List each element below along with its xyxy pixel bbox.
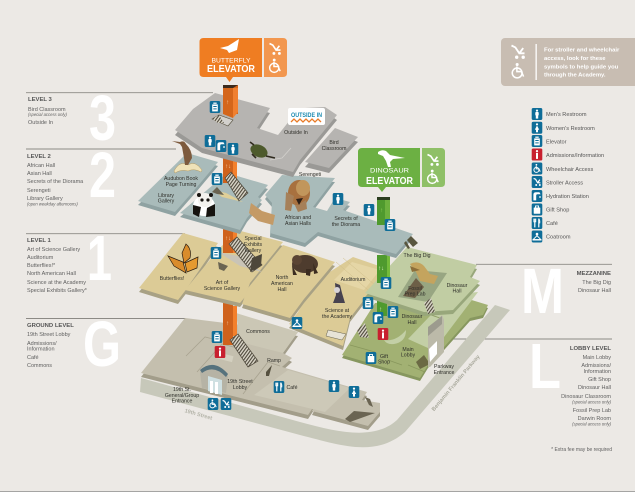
access note box: For stroller and wheelchair bbox=[544, 48, 620, 54]
map labels: Ramp bbox=[267, 358, 281, 364]
legend: gift shop: Gift Shop bbox=[546, 208, 569, 214]
big level numerals bbox=[83, 82, 564, 402]
legend: coatroom: Coatroom bbox=[546, 234, 571, 240]
map labels: Serengeti bbox=[299, 172, 321, 178]
map labels: Science at bbox=[325, 308, 350, 314]
floor: lobby level bbox=[342, 292, 488, 381]
text block: level 1: Butterflies!* bbox=[27, 263, 56, 269]
map labels: Entrance bbox=[172, 398, 192, 404]
floor: level 3 main bbox=[175, 93, 337, 177]
elevator arrows: ↑ bbox=[226, 321, 229, 327]
icon: level 3 men's restroom bbox=[205, 135, 215, 147]
map labels: 19th St. bbox=[173, 387, 191, 393]
map labels: Dinosaur bbox=[402, 314, 423, 320]
street and parkway bbox=[140, 305, 510, 447]
illustration: panda bbox=[193, 193, 215, 217]
map labels: Audubon Book bbox=[164, 176, 198, 182]
text block: level 1 bbox=[27, 238, 88, 294]
map labels: Science Gallery bbox=[204, 286, 241, 292]
text block: level 2: (open weekday afternoons) bbox=[27, 202, 78, 206]
text block: lobby level: Darwin Room bbox=[578, 416, 611, 422]
access note box: access, look for these bbox=[544, 56, 606, 62]
elevator shaft: butterfly level 2 to 3 bbox=[223, 155, 237, 183]
icon: ground cafe bbox=[274, 381, 284, 393]
legend: cafe: Café bbox=[546, 221, 558, 227]
elevator shaft: butterfly top bbox=[223, 85, 238, 118]
text block: lobby level: LOBBY LEVEL bbox=[570, 346, 611, 352]
map labels: Shop bbox=[378, 360, 390, 366]
legend: hydration: Hydration Station bbox=[546, 194, 589, 200]
map labels: Gift bbox=[380, 354, 389, 360]
text block: level 3: Bird Classroom bbox=[28, 107, 66, 113]
stairs: ground level bbox=[230, 334, 258, 367]
elevator shaft: dinosaur lobby to mezzanine bbox=[377, 300, 387, 316]
text block: level 3: LEVEL 3 bbox=[28, 97, 53, 103]
text block: ground level: GROUND LEVEL bbox=[27, 323, 74, 329]
illustration: turtle bbox=[248, 142, 275, 160]
text block: lobby level: (special access only) bbox=[572, 400, 612, 404]
map labels: American bbox=[271, 281, 293, 287]
text block: level 3: Outside In bbox=[28, 120, 53, 126]
floor: mezzanine bbox=[365, 247, 480, 316]
text block: level 1: North American Hall bbox=[27, 271, 76, 277]
text block: level 1: Science at the Academy bbox=[27, 280, 86, 286]
legend: admissions: Admissions/Information bbox=[546, 153, 604, 159]
icon: level 1 elevator bbox=[211, 247, 221, 259]
map labels: Main bbox=[402, 347, 414, 353]
map labels: the Diorama bbox=[332, 222, 360, 228]
icon: level 3 elevator bbox=[210, 101, 220, 113]
floor: level 2 east bbox=[265, 175, 418, 258]
illustration: dinosaur skeleton bbox=[410, 262, 438, 284]
illustration: lion bbox=[285, 180, 310, 212]
icon: level 3 hydration bbox=[216, 140, 226, 152]
map labels: Dinosaur bbox=[447, 283, 468, 289]
text block: level 1: Special Exhibits Gallery* bbox=[27, 288, 88, 294]
stairs: level 2 to mezzanine bbox=[404, 236, 418, 249]
legend: wheelchair: Wheelchair Access bbox=[546, 167, 593, 173]
floor: north american hall bbox=[242, 245, 335, 322]
elevator shaft: butterfly ground to level 1 bbox=[223, 303, 237, 345]
entrance: 19th street bbox=[200, 365, 228, 395]
butterfly elevator callout: ELEVATOR bbox=[207, 64, 256, 75]
map labels: Butterflies! bbox=[160, 276, 184, 282]
map labels: Hall bbox=[278, 287, 286, 293]
street labels bbox=[184, 353, 482, 422]
outside in logo bbox=[288, 108, 325, 125]
map labels: 19th Street bbox=[227, 379, 253, 385]
street labels: 19th Street bbox=[184, 408, 213, 422]
map labels: Library bbox=[158, 193, 174, 199]
big level numerals: 2 bbox=[89, 139, 116, 211]
map labels: Auditorium bbox=[341, 277, 365, 283]
legend: elevator: Elevator bbox=[546, 140, 567, 146]
text block: mezzanine: Dinosaur Hall bbox=[578, 288, 611, 294]
text block: lobby level: Fossil Prep Lab bbox=[573, 408, 611, 414]
map labels: Commons bbox=[246, 329, 270, 335]
map labels: Gallery bbox=[158, 198, 175, 204]
floor: level 1 science and auditorium bbox=[289, 257, 385, 350]
map icons bbox=[205, 101, 398, 410]
icon: lobby gift shop bbox=[366, 352, 376, 364]
text block: level 2: Library Gallery bbox=[27, 196, 63, 202]
text block: mezzanine: MEZZANINE bbox=[577, 271, 611, 277]
map labels: Exhibits bbox=[244, 242, 262, 248]
icon: mezzanine elevator bbox=[381, 277, 391, 289]
text block: ground level: Information bbox=[27, 346, 55, 352]
icon: level 2 east elevator bbox=[385, 219, 395, 231]
big level numerals: L bbox=[529, 330, 561, 402]
big level numerals: 3 bbox=[89, 82, 116, 154]
floor: level 1 west bbox=[139, 233, 218, 304]
icon: ground information bbox=[215, 346, 225, 358]
legend: men's restroom: Men's Restroom bbox=[546, 112, 587, 118]
text block: lobby level: Admissions/ bbox=[581, 363, 611, 369]
text block: level 2: African Hall bbox=[27, 163, 55, 169]
map labels: Page Turning bbox=[166, 182, 197, 188]
illustration: open book bbox=[174, 163, 202, 173]
map labels: Outside In bbox=[284, 130, 308, 136]
legend bbox=[532, 108, 604, 242]
map labels: Parkway bbox=[434, 364, 454, 370]
text block: ground level: Commons bbox=[27, 363, 52, 369]
stairs: level 1 center bbox=[218, 237, 262, 272]
icon: level 2 elevator bbox=[212, 173, 222, 185]
elevator arrows: ↑↓ bbox=[225, 164, 231, 170]
entrance: parkway bbox=[428, 315, 444, 367]
icon: level 1 coatroom bbox=[292, 317, 302, 329]
text block: ground level: Café bbox=[27, 355, 39, 361]
text block: level 1: Art of Science Gallery bbox=[27, 247, 80, 253]
level leader lines bbox=[26, 93, 612, 339]
map labels: North bbox=[276, 275, 288, 281]
icon: lobby hydration bbox=[373, 312, 383, 324]
icon: ground stroller bbox=[221, 398, 231, 410]
map labels: Bird bbox=[329, 140, 339, 146]
icon: level 3 restroom bbox=[228, 143, 238, 155]
text block: mezzanine: The Big Dig bbox=[582, 280, 611, 286]
access note box: symbols to help guide you bbox=[544, 64, 619, 70]
butterfly elevator callout: BUTTERFLY bbox=[212, 58, 251, 64]
text block: level 2: LEVEL 2 bbox=[27, 154, 52, 160]
map labels: Secrets of bbox=[334, 216, 358, 222]
elevator arrows: ↑ bbox=[380, 208, 383, 214]
elevator arrows bbox=[225, 100, 384, 327]
map labels bbox=[158, 130, 468, 404]
map labels: Art of bbox=[216, 280, 229, 286]
elevator shaft: dinosaur mezzanine to level 2 bbox=[377, 255, 390, 283]
stairs: mezzanine bbox=[424, 298, 435, 314]
stairs: lobby level bbox=[357, 323, 369, 338]
map labels: Gallery bbox=[245, 248, 262, 254]
fossil pit bbox=[398, 270, 447, 302]
text block: level 3 bbox=[28, 97, 67, 126]
floor: level 1 center bbox=[185, 230, 283, 307]
floor: level 2 library bbox=[138, 153, 218, 216]
outside in logo: OUTSIDE IN bbox=[291, 113, 322, 119]
legend: stroller: Stroller Access bbox=[546, 180, 583, 186]
elevator arrows: ↑ bbox=[379, 307, 382, 313]
map labels: Entrance bbox=[434, 370, 454, 376]
illustration: bird bbox=[172, 141, 192, 165]
text block: lobby level: Information bbox=[583, 369, 611, 375]
text block: level 2: Secrets of the Diorama bbox=[27, 179, 84, 185]
text block: level 3: (special access only) bbox=[28, 112, 67, 117]
dinosaur elevator callout: DINOSAUR bbox=[370, 168, 409, 174]
text block: level 2: Asian Hall bbox=[27, 171, 52, 177]
map labels: Lobby bbox=[233, 385, 247, 391]
footnote: * Extra fee may be required bbox=[551, 447, 612, 453]
map labels: General/Group bbox=[165, 393, 199, 399]
big level numerals: 1 bbox=[87, 222, 112, 294]
dinosaur elevator callout: ELEVATOR bbox=[366, 176, 414, 187]
floor: ground level bbox=[141, 313, 380, 430]
map labels: Lobby bbox=[401, 352, 415, 358]
elevator shaft: dinosaur bbox=[377, 197, 390, 226]
legend: women's restroom: Women's Restroom bbox=[546, 126, 595, 132]
access note box: through the Academy. bbox=[544, 72, 606, 78]
stairs: level 2 bbox=[212, 172, 248, 201]
access note box bbox=[501, 38, 635, 86]
text block: ground level: 19th Street Lobby bbox=[27, 332, 71, 338]
icon: ground east men's restroom bbox=[329, 380, 339, 392]
butterfly elevator callout bbox=[200, 38, 287, 82]
map labels: Classroom bbox=[322, 146, 346, 152]
text block: level 2: Serengeti bbox=[27, 188, 51, 194]
text block: lobby level bbox=[561, 346, 612, 426]
stairs: level 3 bbox=[212, 115, 233, 126]
text block: level 1: LEVEL 1 bbox=[27, 238, 52, 244]
elevator arrows: ↑↓ bbox=[225, 236, 231, 242]
icon: lobby elevator bbox=[388, 306, 398, 318]
text block: level 1: Auditorium bbox=[27, 255, 54, 261]
map labels: Hall bbox=[408, 320, 416, 326]
map labels: Fossil bbox=[408, 286, 422, 292]
icon: ground wheelchair bbox=[208, 398, 218, 410]
floor: level 2 center bbox=[180, 173, 268, 234]
text block: ground level bbox=[27, 323, 74, 369]
text block: level 2 bbox=[27, 154, 84, 206]
big level numerals: M bbox=[521, 255, 564, 327]
map labels: Prep Lab bbox=[404, 292, 426, 298]
illustration: science specimen bbox=[333, 283, 345, 303]
text block: lobby level: (special access only) bbox=[572, 422, 612, 426]
illustration: bear bbox=[292, 255, 318, 276]
elevator arrows: ↑↓ bbox=[378, 266, 384, 272]
big level numerals: G bbox=[83, 308, 121, 380]
icon: ground east women's restroom bbox=[349, 386, 359, 398]
text block: mezzanine bbox=[577, 271, 611, 294]
icon: level 1 east elevator bbox=[363, 297, 373, 309]
map labels: African and bbox=[285, 215, 311, 221]
map labels: The Big Dig bbox=[403, 253, 431, 259]
map labels: Special bbox=[244, 236, 262, 242]
dinosaur elevator callout bbox=[358, 148, 445, 192]
illustration: butterfly bbox=[168, 244, 198, 273]
text block: lobby level: Dinosaur Classroom bbox=[561, 394, 611, 400]
text block: lobby level: Dinosaur Hall bbox=[578, 385, 611, 391]
stairs: ramp bbox=[266, 365, 272, 376]
floor: level 3 bird classroom bbox=[305, 128, 358, 173]
elevator shaft: butterfly level 1 to 2 bbox=[223, 227, 237, 253]
stairs: east end bbox=[345, 411, 375, 422]
text block: ground level: Admissions/ bbox=[27, 341, 57, 347]
illustration: fossil relief bbox=[249, 203, 275, 225]
map labels: the Academy bbox=[322, 314, 352, 320]
map labels: Asian Halls bbox=[285, 221, 311, 227]
map labels: Café bbox=[287, 385, 298, 391]
street labels: Benjamin Franklin Parkway bbox=[431, 353, 482, 413]
icon: lobby information bbox=[378, 328, 388, 340]
elevator arrows: ↑ bbox=[226, 100, 229, 106]
icon: ground elevator bbox=[212, 331, 222, 343]
icon: level 2 restroom bbox=[333, 193, 343, 205]
icon: level 2 east restroom bbox=[364, 204, 374, 216]
map labels: Hall bbox=[453, 288, 461, 294]
text block: lobby level: Main Lobby bbox=[583, 355, 611, 361]
text block: lobby level: Gift Shop bbox=[588, 377, 611, 383]
